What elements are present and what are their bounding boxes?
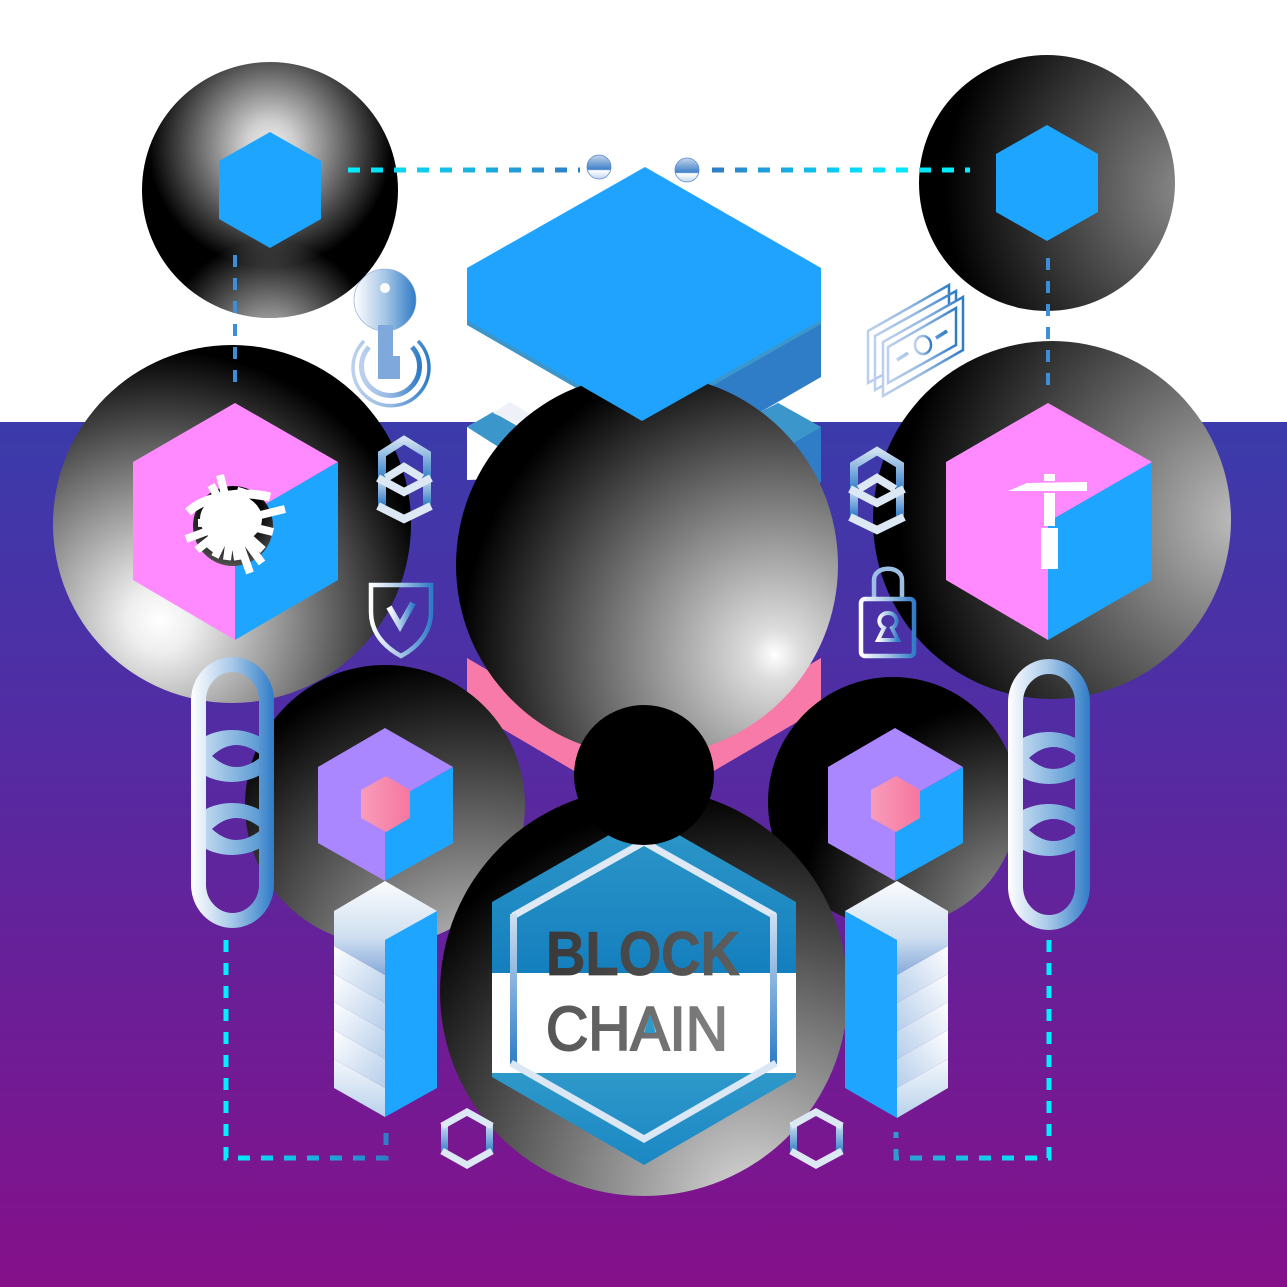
icon: left stacked hexagons — [378, 440, 431, 519]
icon: shield — [371, 585, 431, 656]
top left blue hexagon — [219, 132, 321, 248]
badge text: CHAIN: CHAIN — [546, 995, 728, 1064]
icon: banknotes — [868, 285, 963, 396]
black connector circle — [574, 705, 714, 845]
lower stacked hexagon layer — [467, 402, 821, 812]
lower left circle — [245, 665, 525, 945]
badge text: BLOCK: BLOCK — [546, 920, 740, 989]
central blockchain badge — [492, 815, 796, 1165]
icon: starburst — [186, 475, 285, 573]
bottom dashed connector right — [896, 940, 1049, 1158]
icon: key — [353, 269, 429, 406]
vertical dashed connector right — [1046, 258, 1050, 386]
lower right circle — [768, 677, 1018, 927]
small hexagon right — [791, 1112, 842, 1165]
top hexagon slab — [467, 167, 821, 421]
top hexagon slab side — [467, 316, 821, 447]
top right circle — [919, 55, 1175, 311]
letter A counter — [644, 1014, 656, 1033]
right tower — [845, 881, 948, 1118]
right chain — [1008, 666, 1090, 922]
left chain — [191, 664, 274, 920]
top left circle — [142, 62, 398, 318]
icon: pickaxe — [1008, 474, 1087, 569]
top dashed connector left — [348, 168, 580, 172]
right pink cube — [946, 403, 1152, 640]
lower right purple cube — [828, 728, 963, 881]
connector node right — [675, 158, 699, 182]
vertical dashed connector left — [233, 255, 237, 382]
left pink cube — [133, 403, 338, 640]
small hexagon left — [442, 1112, 492, 1165]
connector node left — [587, 155, 611, 179]
bottom central circle — [440, 788, 848, 1196]
icon: padlock — [861, 569, 914, 656]
right large circle — [873, 341, 1231, 699]
left tower — [334, 881, 437, 1117]
icon: right stacked hexagons — [850, 451, 904, 530]
left large circle — [53, 345, 411, 703]
top right blue hexagon — [996, 125, 1098, 241]
top dashed connector right — [712, 168, 970, 172]
bottom dashed connector left — [226, 940, 386, 1158]
lower left purple cube — [318, 728, 453, 881]
central circle — [456, 374, 838, 756]
badge inner outline — [511, 842, 776, 1139]
